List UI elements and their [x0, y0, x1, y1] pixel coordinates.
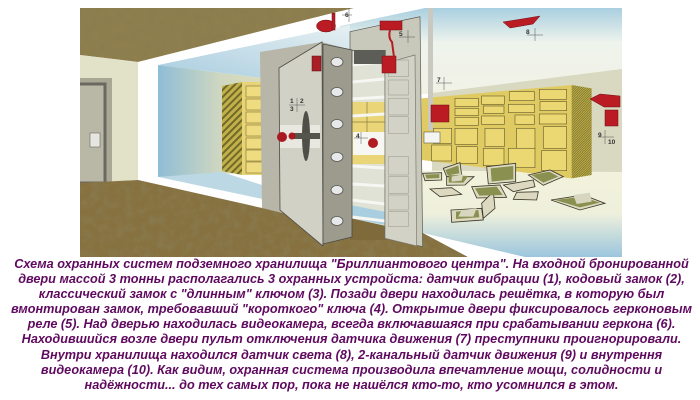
- far upper wall: [340, 8, 622, 94]
- number labels: 1: [290, 98, 294, 105]
- caption text: [11, 257, 692, 392]
- vault floor: [340, 170, 622, 257]
- white right floor edge: [423, 233, 525, 257]
- floor: [80, 180, 468, 257]
- entry ceiling plane: [158, 25, 350, 78]
- illustration: vault with security devices: [80, 8, 622, 257]
- number labels: 3: [290, 106, 294, 113]
- red devices: [316, 13, 620, 126]
- number labels: 6: [345, 12, 349, 19]
- crosshair markers: [289, 8, 614, 144]
- vault door: [277, 42, 352, 246]
- room interior: [158, 8, 622, 257]
- number labels: 2: [300, 98, 304, 105]
- lower vault floor behind gate: [352, 206, 384, 225]
- caption text: Внутри хранилища находился датчик света (8), 2-канальный датчик движения (9) и внутрення: [41, 348, 662, 362]
- right back wall: [432, 69, 622, 176]
- light sensor 8: [503, 16, 540, 28]
- video camera 6: [316, 13, 336, 32]
- white ceiling band: [138, 8, 425, 65]
- door bolts: [331, 58, 343, 226]
- scattered deposit boxes: [423, 163, 605, 222]
- right cabinets: [422, 85, 592, 178]
- cabinets seen through gate: [352, 102, 385, 164]
- number labels: 5: [399, 31, 403, 38]
- door edge: [323, 44, 352, 244]
- vault gate with bars: [352, 62, 385, 221]
- door face: [279, 42, 323, 246]
- far left blue wall: [158, 65, 262, 177]
- gate backdrop: [352, 51, 384, 212]
- far cabinet: [222, 82, 264, 175]
- ceiling: [80, 8, 354, 62]
- caption text: Схема охранных систем подземного хранилища "Бриллиантового центра". На входной бронированной: [14, 257, 689, 271]
- number labels: 10: [608, 139, 616, 146]
- caption text: Находившийся возле двери пульт отключения датчика движения (7) преступники проигнорировали.: [22, 332, 681, 346]
- number labels: 9: [598, 132, 602, 139]
- white door jamb: [138, 62, 158, 178]
- caption text: двери массой 3 тонны располагались 3 охранных устройста: датчик вибрации (1), кодовый замок (2),: [18, 272, 685, 286]
- caption text: вмонтирован замок, требовавший "короткого" ключа (4). Открытие двери фиксировалось герконовым: [11, 302, 692, 316]
- number labels: [290, 12, 616, 146]
- vibration sensor: [312, 56, 321, 71]
- caption text: реле (5). Над дверью находилась видеокамера, всегда включавшаяся при срабатывании геркона (6).: [28, 317, 675, 331]
- reed relay 5: [380, 21, 402, 73]
- door wheel handle: [277, 111, 320, 161]
- floor behind gate: [350, 218, 386, 240]
- door back panel: [260, 42, 346, 214]
- number labels: 8: [526, 29, 530, 36]
- white conduit and switch: [424, 8, 440, 143]
- white floor band: [158, 177, 262, 199]
- number labels: 7: [437, 77, 441, 84]
- left wall: [80, 55, 138, 183]
- anteroom door: [80, 78, 112, 183]
- caption text: надёжности... до тех самых пор, пока не нашёлся кто-то, кто усомнился в этом.: [85, 378, 618, 392]
- gate lock plate (4): [353, 132, 385, 155]
- motion panel 7: [431, 105, 449, 122]
- steel door frame: [350, 17, 423, 247]
- entry floor plane: [158, 172, 262, 199]
- caption text: видеокамера (10). Как видим, охранная система производила впечатление мощи, солидности и: [41, 363, 662, 377]
- motion sensor and camera 9/10: [590, 94, 620, 126]
- caption text: классический замок с "длинным" ключом (3). Позади двери находилась решётка, в которую был: [39, 287, 664, 301]
- number labels: 4: [356, 133, 360, 140]
